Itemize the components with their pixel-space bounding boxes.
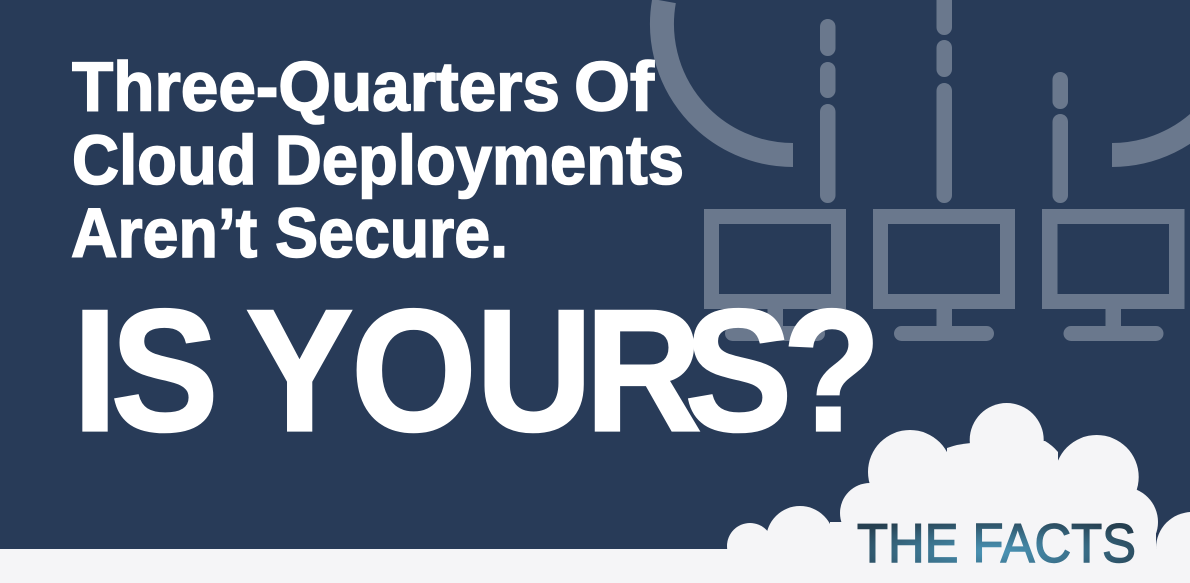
heading line 3: Aren’t Secure. [71, 194, 508, 272]
cloud outline left arc [662, 1, 793, 155]
the facts label: THE FACTS [857, 512, 1136, 574]
icon: cloud network outline [662, 0, 1190, 341]
cloud outline right arc [1112, 105, 1190, 155]
monitor 1 [704, 209, 846, 341]
heading: three-quarters of cloud deployments aren't secure [71, 48, 684, 272]
cloud footer [0, 403, 1190, 583]
connector line 3 [1052, 72, 1068, 203]
monitor 3 [1042, 209, 1184, 341]
connector line 1 [820, 19, 836, 203]
headline: is yours: IS YOURS? [73, 273, 881, 468]
connector line 2 [936, 0, 952, 203]
heading line 2: Cloud Deployments [72, 121, 684, 199]
heading line 1: Of [574, 48, 655, 126]
monitor 2 [873, 209, 1015, 341]
heading line 1: Three-Quarters [72, 48, 560, 126]
